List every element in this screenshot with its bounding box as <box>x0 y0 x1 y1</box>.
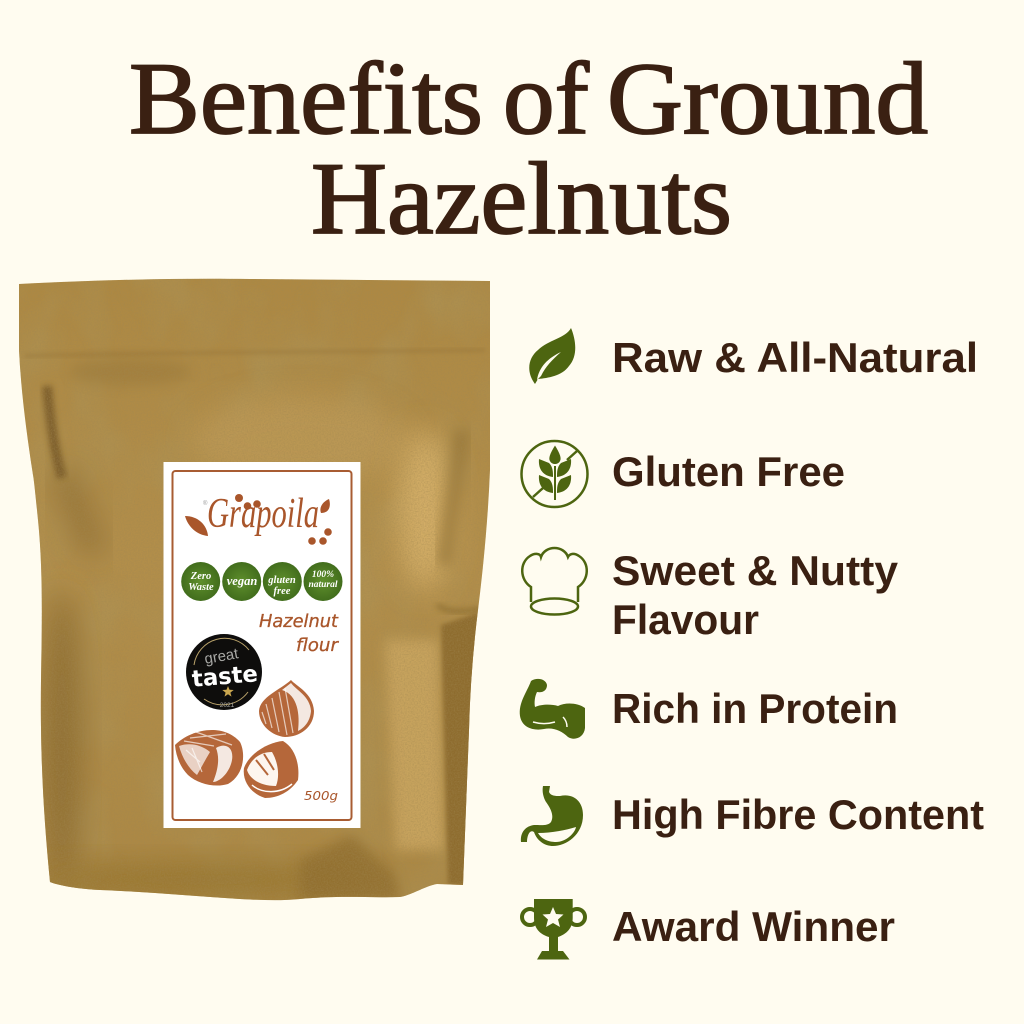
bag body <box>10 275 500 910</box>
certification badges: free <box>274 586 291 597</box>
certification badges: natural <box>308 580 338 590</box>
icon: stomach <box>521 786 583 846</box>
great taste award seal: taste <box>191 661 259 693</box>
icon: leaf <box>529 328 575 384</box>
great taste award seal: 2021 <box>220 702 235 709</box>
label: High Fibre Content <box>612 791 984 838</box>
title <box>129 42 928 256</box>
certification badges: 100% <box>312 570 334 580</box>
hazelnut illustrations <box>175 680 314 798</box>
hazelnut: right <box>244 741 298 798</box>
benefit: gluten free <box>522 441 845 507</box>
product name <box>259 612 340 656</box>
label: Gluten Free <box>612 448 845 495</box>
product name: Hazelnut <box>259 612 339 632</box>
title: of <box>503 42 590 156</box>
benefit: sweet and nutty flavour <box>522 547 899 643</box>
benefit: high fibre content <box>521 786 984 846</box>
hazelnut: top <box>259 680 314 737</box>
brand logo: ® <box>203 500 208 507</box>
product name: flour <box>296 636 340 656</box>
brand logo <box>185 491 332 545</box>
icon: trophy <box>522 899 585 960</box>
icon: chef hat <box>522 548 587 614</box>
icon: flexed arm <box>520 679 585 739</box>
certification badges: vegan <box>227 574 257 588</box>
great taste award seal: great <box>203 645 240 668</box>
label: Flavour <box>612 596 759 643</box>
brand logo: Grapoila <box>207 491 319 537</box>
title: Ground <box>607 42 928 156</box>
title: Benefits <box>129 42 483 156</box>
great taste award seal <box>186 634 262 710</box>
icon: crossed-out wheat <box>522 441 588 507</box>
certification badges: gluten <box>267 575 296 586</box>
label <box>612 547 899 643</box>
label: Raw & All-Natural <box>612 334 978 381</box>
certification badges <box>181 562 342 601</box>
certification badges: Zero <box>190 571 211 582</box>
label: Award Winner <box>612 903 895 950</box>
product label <box>164 462 360 828</box>
benefit: rich in protein <box>520 679 898 739</box>
hazelnut: left <box>175 730 243 786</box>
panel: kraft paper product bag <box>10 275 500 910</box>
title: Hazelnuts <box>311 142 732 256</box>
certification badges: Waste <box>188 582 214 593</box>
net weight: 500g <box>304 788 338 803</box>
label: Rich in Protein <box>612 685 898 732</box>
panel: benefits list <box>520 328 984 960</box>
benefit: raw and all-natural <box>529 328 978 384</box>
benefit: award winner <box>522 899 895 960</box>
label: Sweet & Nutty <box>612 547 899 594</box>
